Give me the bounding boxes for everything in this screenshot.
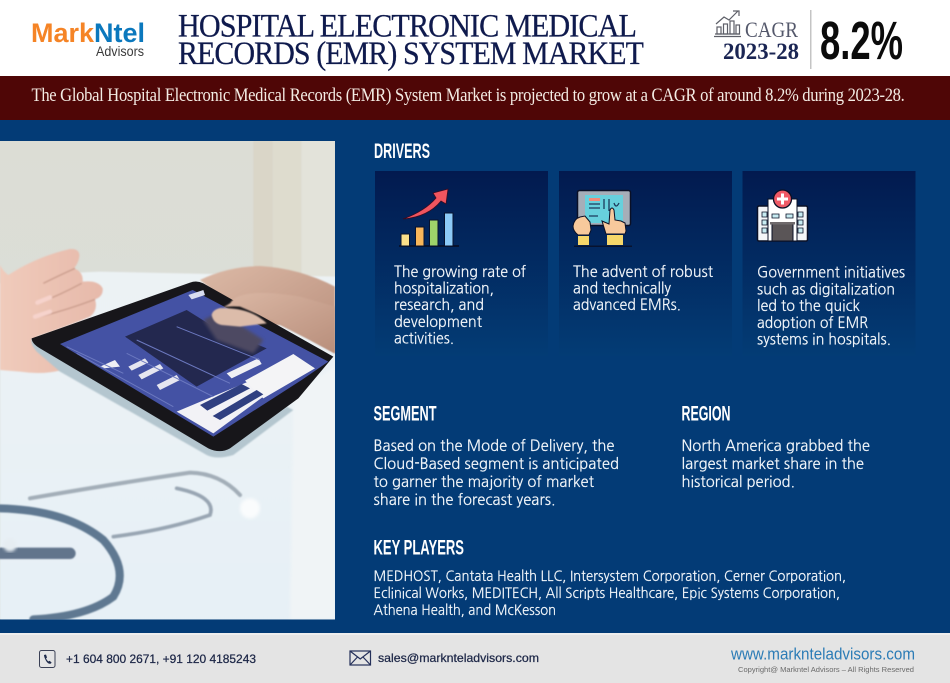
text: driver three: systems in hospitals. [757, 332, 891, 348]
text: driver two: and technically [573, 282, 671, 296]
footer band [0, 633, 950, 683]
panel: driver advanced EMRs [559, 171, 732, 356]
icon: CAGR growth chart [714, 11, 741, 36]
text: driver three: Government initiatives [757, 266, 905, 280]
panel: segment: Cloud-Based segment is anticipated [374, 457, 619, 472]
text: driver two: The advent of robust [573, 265, 714, 280]
text: driver one: development [394, 315, 483, 330]
heading: drivers: DRIVERS [374, 140, 430, 163]
panel: region: historical period. [682, 475, 795, 490]
main blue panel [0, 120, 950, 633]
header band [0, 0, 950, 76]
CAGR period: 2023-28 [723, 39, 799, 64]
panel: region [682, 402, 870, 490]
title: RECORDS (EMR) SYSTEM MARKET [178, 36, 644, 72]
logo: MarkNtel Advisors: Advisors [96, 44, 144, 59]
photo: tablet and hands [0, 140, 340, 630]
panel: segment [374, 402, 619, 508]
text: email: sales@marknteladvisors.com [378, 651, 539, 665]
panel: key players: Eclinical Works, MEDITECH, All Scripts Healthcare, Epic Systems Corporation, [374, 586, 840, 601]
text: driver three: led to the quick [757, 299, 860, 314]
text: driver one: hospitalization, [394, 282, 494, 296]
icon: phone [40, 650, 55, 668]
panel: region: REGION [682, 402, 730, 426]
panel: region: largest market share in the [682, 457, 864, 472]
text: phone numbers: +1 604 800 2671, +91 120 4185243 [66, 652, 256, 666]
panel: driver hospitalization [375, 171, 548, 356]
CAGR value: 8.2% [820, 11, 903, 71]
text: copyright: Copyright@ Markntel Advisors – All Rights Reserved [738, 665, 914, 674]
CAGR period: CAGR [745, 17, 798, 42]
text: driver one: The growing rate of [394, 265, 527, 280]
panel: segment: share in the forecast years. [374, 493, 556, 508]
text: driver one [394, 265, 527, 346]
logo: MarkNtel Advisors: MarkNtel [31, 18, 145, 48]
title: HOSPITAL ELECTRONIC MEDICAL [178, 8, 636, 44]
text: website: www.marknteladvisors.com [730, 646, 915, 664]
icon: rising bar chart [399, 189, 459, 247]
panel: key players [374, 536, 846, 618]
text: driver one: activities. [394, 332, 454, 346]
text: driver two [573, 265, 714, 313]
panel: segment: to garner the majority of market [374, 475, 595, 490]
panel: segment: SEGMENT [374, 402, 437, 426]
panel: segment: Based on the Mode of Delivery, the [374, 439, 614, 454]
text: driver two: advanced EMRs. [573, 298, 681, 313]
icon: mail envelope [350, 651, 370, 665]
title [178, 8, 644, 72]
text: driver three: such as digitalization [757, 282, 895, 298]
icon: tablet held by hands [573, 190, 632, 247]
icon: hospital building [758, 190, 808, 241]
panel: key players: MEDHOST, Cantata Health LLC, Intersystem Corporation, Cerner Corporation, [374, 569, 846, 584]
text: driver one: research, and [394, 298, 484, 313]
CAGR period [723, 17, 799, 64]
panel: key players: Athena Health, and McKesson [374, 603, 556, 618]
panel: region: North America grabbed the [682, 439, 870, 454]
panel: key players: KEY PLAYERS [374, 536, 464, 560]
panel: driver government initiatives [742, 171, 916, 356]
text: driver three [757, 266, 905, 348]
text: driver three: adoption of EMR [757, 316, 868, 331]
summary banner [0, 76, 950, 120]
